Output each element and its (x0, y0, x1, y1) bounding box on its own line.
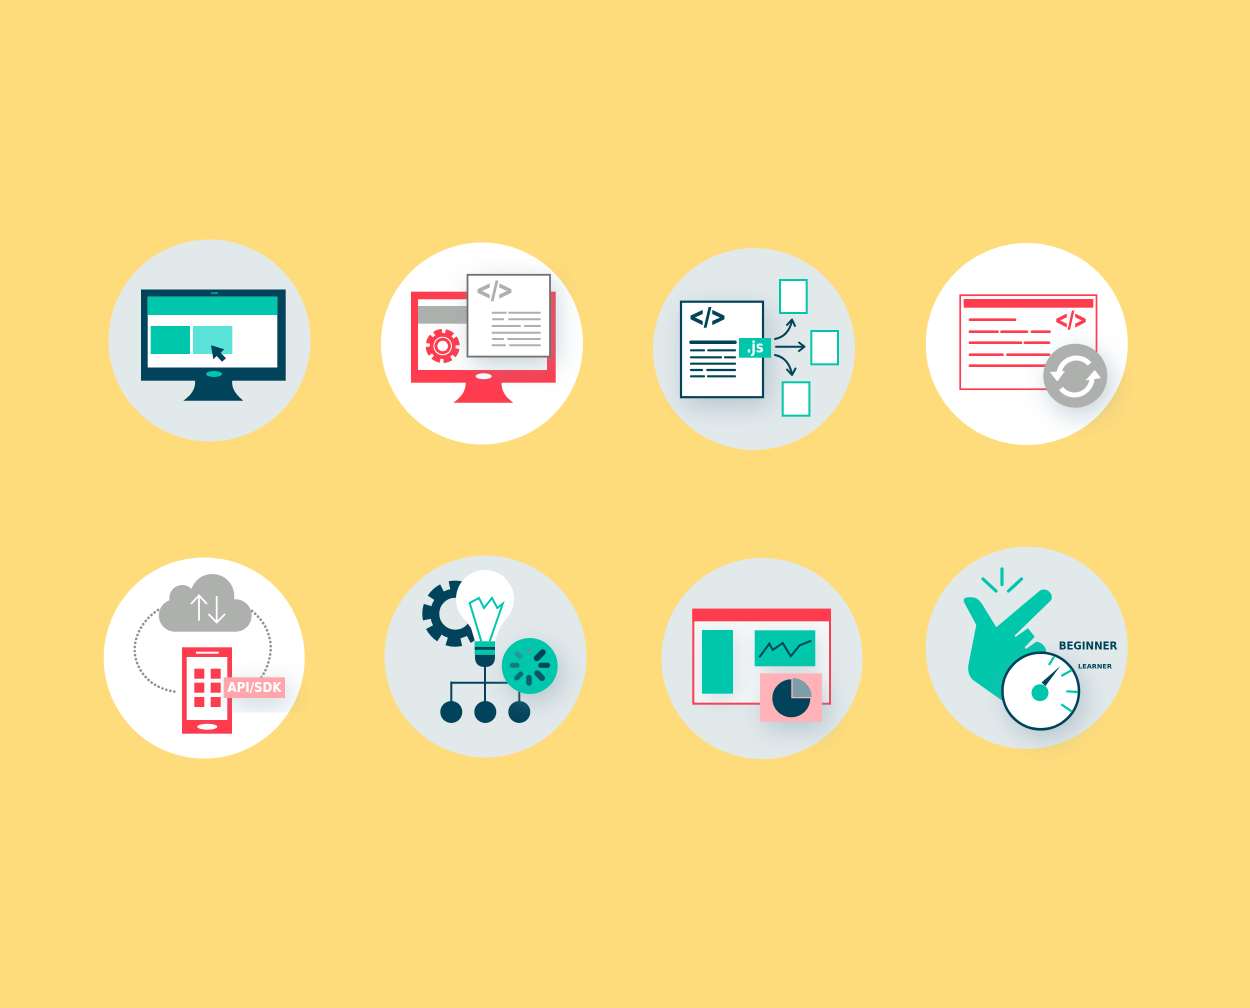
icon: speed dial (1002, 653, 1079, 729)
panel: idea network (384, 556, 586, 758)
document (681, 302, 763, 397)
code symbol: </> (476, 276, 513, 304)
js badge: .js (746, 338, 764, 357)
panel: code sync window (926, 243, 1128, 445)
panel: beginner snap (926, 547, 1128, 749)
panel: code on monitor (381, 242, 583, 444)
code symbol: </> (689, 303, 726, 331)
pie chart card (760, 673, 822, 722)
label: beginner: BEGINNER (1059, 640, 1118, 652)
icon: red monitor (411, 292, 556, 403)
network tree (440, 665, 530, 723)
dashboard window (692, 609, 831, 704)
code document (468, 275, 550, 357)
code symbol: </> (1055, 308, 1087, 334)
dotted loop (135, 610, 271, 692)
panel: analytics dashboard (662, 558, 862, 759)
panel: desktop website (108, 240, 310, 442)
icon: loading spinner (502, 638, 558, 694)
panel: javascript document (653, 248, 855, 450)
icon: mouse cursor (211, 345, 226, 362)
API/SDK label: API/SDK (228, 681, 282, 696)
icon: monitor (141, 290, 286, 401)
icon: gear (426, 329, 459, 363)
js badge (739, 338, 771, 358)
API/SDK label (224, 677, 285, 698)
arrows (775, 320, 804, 375)
icon: cloud (159, 574, 252, 632)
panel: cloud api (104, 558, 305, 758)
icon: gear (421, 580, 489, 648)
label: learner: LEARNER (1078, 664, 1112, 671)
icon: sync circle (1043, 344, 1107, 408)
green column (702, 630, 733, 694)
code window (960, 295, 1096, 389)
output files (780, 280, 838, 416)
icon: light bulb (456, 570, 514, 667)
icon: phone (182, 647, 232, 734)
icon: snapping hand (964, 569, 1052, 700)
line chart (755, 630, 815, 666)
